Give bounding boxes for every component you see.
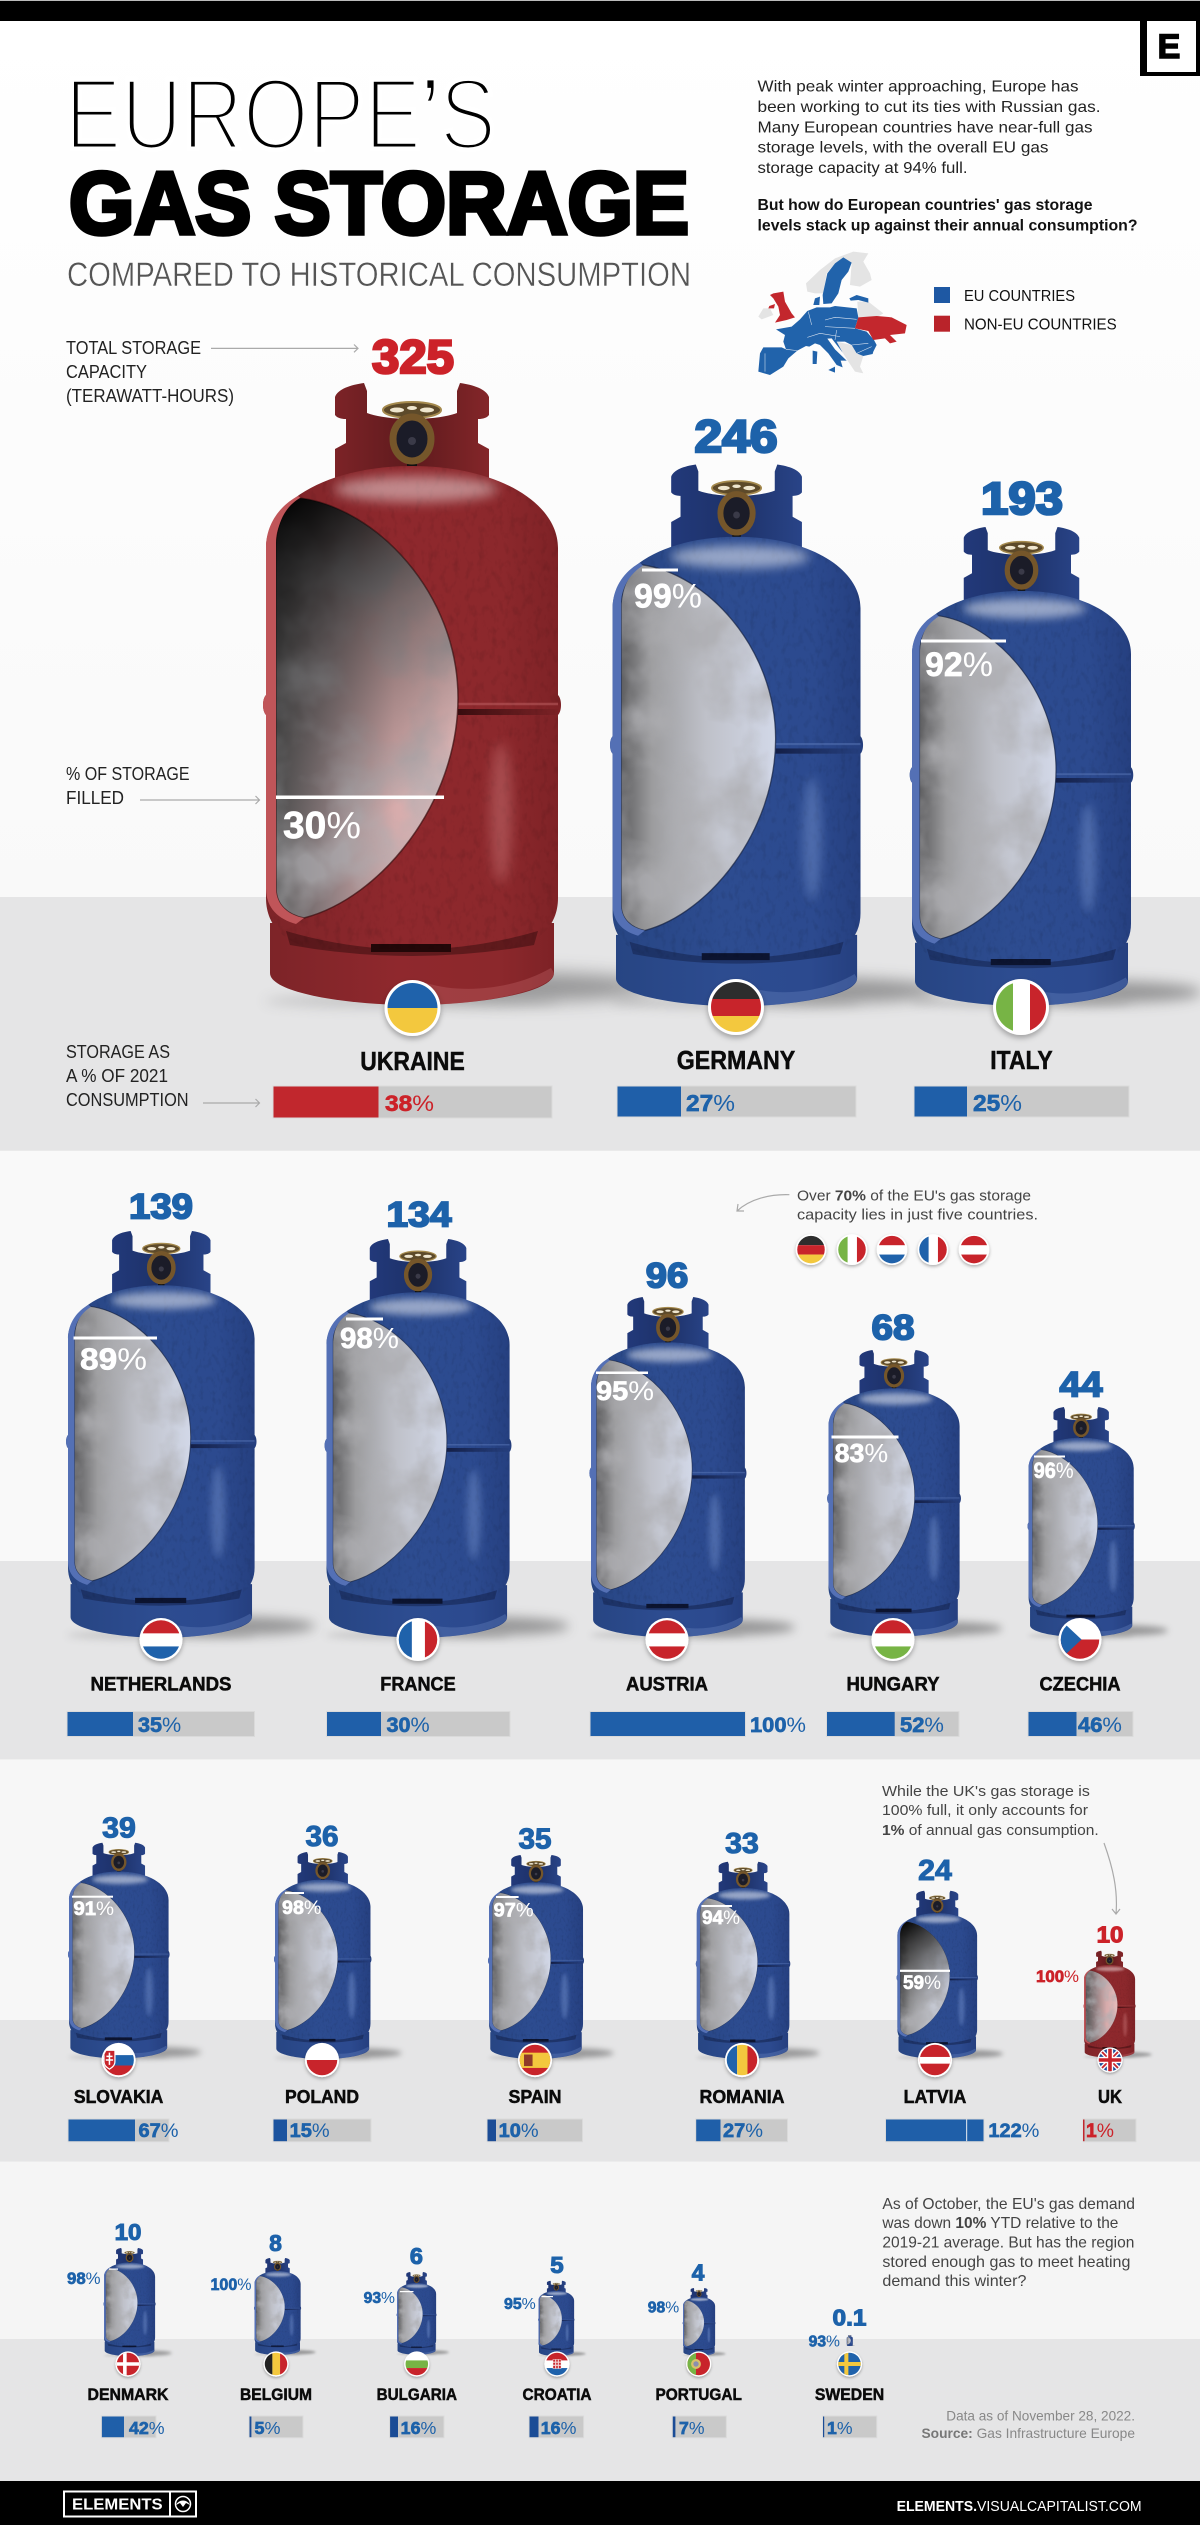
name: Denmark: DENMARK: [88, 2386, 169, 2404]
source note: Data as of November 28, 2022.: [946, 2408, 1135, 2424]
intro text: [758, 78, 1138, 234]
panel: Germany: [610, 411, 941, 1117]
bar: Italy: 25%: [973, 1090, 1022, 1116]
fill level: Romania: 94%: [702, 1907, 740, 1929]
callout: UK storage: 1% of annual gas consumption.: [882, 1822, 1099, 1839]
cylinder: Germany: [610, 464, 941, 1009]
callout: UK storage: While the UK's gas storage is: [882, 1783, 1090, 1800]
panel: Denmark: [67, 2219, 172, 2438]
intro text: been working to cut its ties with Russian gas.: [758, 99, 1100, 116]
value: Latvia capacity: 24: [918, 1855, 952, 1887]
fill level: Netherlands: [74, 1336, 157, 1376]
annotation: percent of storage filled: FILLED: [66, 788, 124, 808]
annotation: storage as percent of consumption: [66, 1042, 260, 1110]
value: Portugal capacity: 4: [692, 2260, 704, 2286]
bar: UK: [1083, 2119, 1136, 2142]
flag: Denmark: [115, 2351, 141, 2377]
bar: Germany: [617, 1086, 856, 1117]
flag: Belgium: [263, 2351, 289, 2377]
panel: Bulgaria: [364, 2243, 457, 2438]
panel: Austria: [589, 1256, 806, 1737]
footer logo: Elements: ELEMENTS: [72, 2496, 163, 2514]
bar: Bulgaria: [390, 2416, 444, 2438]
annotation: total storage capacity: [66, 338, 358, 406]
intro text: But how do European countries' gas storage: [758, 197, 1093, 214]
name: France: FRANCE: [380, 1674, 456, 1696]
bar: Bulgaria: 16%: [401, 2418, 436, 2438]
panel: Slovakia: [68, 1813, 201, 2142]
flag: Ukraine: [384, 980, 440, 1036]
panel: Poland: [273, 1821, 402, 2142]
bar: Netherlands: 35%: [138, 1714, 181, 1737]
panel: Ukraine: [263, 330, 653, 1118]
flag: Czechia: [1058, 1618, 1102, 1661]
name: Austria: AUSTRIA: [626, 1674, 708, 1696]
cylinder: Sweden: [847, 2335, 855, 2346]
panel: France: [325, 1196, 569, 1737]
bar: Spain: 10%: [499, 2121, 539, 2142]
fill level: Spain: 97%: [494, 1900, 534, 1922]
panel: UK: [1036, 1922, 1152, 2142]
bar: Latvia: 122%: [988, 2121, 1039, 2142]
bar: Slovakia: [68, 2119, 179, 2142]
fill level: Denmark: 98%: [67, 2270, 101, 2288]
panel: Latvia: [886, 1855, 1039, 2142]
title: [65, 59, 691, 294]
bar: France: [326, 1712, 510, 1737]
flag: Slovakia: [102, 2043, 136, 2077]
name: Ukraine: UKRAINE: [360, 1046, 465, 1076]
callout: UK storage: 100% full, it only accounts for: [882, 1802, 1088, 1819]
name: UK: UK: [1098, 2087, 1122, 2107]
cylinder: UK: [1083, 1951, 1152, 2058]
cylinder: Italy: [910, 527, 1200, 1008]
top black bar: [0, 0, 1200, 21]
name: Czechia: CZECHIA: [1040, 1674, 1121, 1696]
intro text: storage capacity at 94% full.: [758, 160, 968, 177]
cylinder: Latvia: [897, 1891, 1003, 2059]
bar: Ukraine: [273, 1086, 552, 1118]
annotation: total storage capacity: TOTAL STORAGE: [66, 338, 201, 358]
flag: France: [396, 1618, 440, 1661]
bar: Netherlands: [67, 1712, 254, 1737]
callout: five countries: Over 70% of the EU's gas storage: [797, 1188, 1031, 1204]
fill level: Portugal: 98%: [648, 2300, 679, 2317]
value: Austria capacity: 96: [646, 1256, 688, 1296]
Elements E logo: E: [1158, 28, 1180, 66]
cylinder: Belgium: [254, 2258, 316, 2356]
bar: Slovakia: 67%: [138, 2121, 179, 2142]
flag: Portugal: [686, 2351, 711, 2377]
fill level: Latvia: [900, 1970, 950, 1994]
name: Sweden: SWEDEN: [815, 2386, 884, 2404]
title: COMPARED TO HISTORICAL CONSUMPTION: [67, 256, 691, 294]
intro text: levels stack up against their annual consumption?: [758, 218, 1138, 234]
bar: Hungary: 52%: [900, 1714, 944, 1737]
flag: Croatia: [544, 2351, 570, 2377]
flag: Netherlands: [139, 1618, 183, 1661]
flag: Sweden: [837, 2351, 862, 2377]
flag: Poland: [305, 2043, 339, 2077]
footer logo: Elements: [64, 2491, 196, 2517]
fill level: Croatia: 95%: [504, 2296, 536, 2313]
bar: Portugal: [672, 2416, 726, 2438]
value: Bulgaria capacity: 6: [410, 2243, 423, 2269]
panel: Spain: [487, 1824, 614, 2142]
value: UK capacity: 10: [1097, 1922, 1123, 1948]
fill level: Bulgaria: 93%: [364, 2290, 395, 2307]
bar: Denmark: 42%: [129, 2418, 165, 2438]
panel: Croatia: [504, 2252, 592, 2438]
bar: Poland: 15%: [290, 2121, 330, 2142]
bar: Czechia: 46%: [1078, 1714, 1122, 1737]
fill level: Netherlands: 89%: [80, 1342, 147, 1376]
bar: Belgium: 5%: [254, 2418, 280, 2438]
fill level: Czechia: 96%: [1034, 1458, 1074, 1483]
fill level: Denmark: [67, 2268, 118, 2288]
name: Slovakia: SLOVAKIA: [74, 2087, 163, 2107]
bar: Sweden: 1%: [827, 2418, 852, 2438]
intro text: storage levels, with the overall EU gas: [758, 140, 1048, 156]
bar: Portugal: 7%: [679, 2418, 704, 2438]
name: Germany: GERMANY: [677, 1045, 795, 1075]
title: EUROPE’S: [65, 59, 496, 171]
value: Italy capacity: 193: [981, 473, 1063, 524]
flag: Italy: [993, 979, 1049, 1035]
bar: Italy: [914, 1086, 1129, 1117]
bar: Romania: 27%: [723, 2121, 763, 2142]
fill level: Hungary: 83%: [835, 1438, 888, 1468]
cylinder: Hungary: [827, 1350, 1002, 1638]
fill level: Ukraine: [276, 796, 444, 847]
flag: UK: [1097, 2047, 1123, 2073]
bar: Croatia: 16%: [541, 2418, 576, 2438]
panel: Czechia: [1028, 1366, 1168, 1737]
name: Croatia: CROATIA: [522, 2386, 592, 2404]
cylinder: Netherlands: [66, 1231, 315, 1640]
legend item: EU countries: EU COUNTRIES: [964, 288, 1075, 305]
cylinder: Denmark: [103, 2248, 172, 2357]
arrow: UK callout: [1104, 1843, 1120, 1914]
name: Latvia: LATVIA: [904, 2087, 966, 2107]
name: Italy: ITALY: [990, 1045, 1053, 1075]
bar: Croatia: [529, 2416, 584, 2438]
cylinder: Czechia: [1028, 1407, 1168, 1638]
value: Czechia capacity: 44: [1060, 1366, 1103, 1404]
value: Hungary capacity: 68: [872, 1308, 914, 1348]
fill level: Austria: 95%: [596, 1376, 654, 1406]
value: Slovakia capacity: 39: [102, 1813, 136, 1845]
name: Belgium: BELGIUM: [240, 2386, 312, 2404]
intro text: With peak winter approaching, Europe has: [758, 78, 1078, 96]
bar: Belgium: [249, 2416, 303, 2438]
fill level: UK: 100%: [1036, 1968, 1079, 1986]
cylinder: Poland: [274, 1852, 402, 2060]
name: Portugal: PORTUGAL: [655, 2386, 742, 2404]
name: Poland: POLAND: [285, 2087, 359, 2107]
name: Hungary: HUNGARY: [846, 1674, 940, 1696]
cylinder: Portugal: [683, 2288, 726, 2356]
flag: Austria: [645, 1618, 689, 1661]
value: Poland capacity: 36: [306, 1821, 338, 1853]
bar: Hungary: [826, 1712, 959, 1737]
callout: five countries: capacity lies in just five countries.: [797, 1206, 1038, 1224]
panel: Sweden: [809, 2305, 884, 2438]
cylinder: Croatia: [538, 2281, 586, 2356]
name: Netherlands: NETHERLANDS: [90, 1674, 232, 1696]
name: Spain: SPAIN: [508, 2087, 562, 2107]
annotation: percent of storage filled: [66, 764, 260, 808]
flag: Romania: [725, 2043, 759, 2077]
Elements E logo: [1140, 21, 1200, 76]
fill level: Italy: [921, 640, 1006, 684]
intro text: Many European countries have near-full gas: [758, 120, 1092, 136]
callout: EU gas demand: 2019-21 average. But has the region: [882, 2234, 1134, 2252]
callout: EU gas demand: stored enough gas to meet heating: [882, 2254, 1130, 2271]
callout: UK storage: [882, 1783, 1120, 1914]
fill level: Croatia: [504, 2296, 553, 2313]
value: Denmark capacity: 10: [115, 2219, 141, 2245]
annotation: storage as percent of consumption: STORAGE AS: [66, 1042, 170, 1062]
arrow: five countries: [737, 1195, 789, 1211]
fill level: France: 98%: [340, 1323, 399, 1355]
bar: Ukraine: 38%: [385, 1091, 434, 1116]
callout: EU gas demand: [881, 2196, 1135, 2290]
value: Belgium capacity: 8: [269, 2230, 282, 2256]
flag: Germany: [708, 979, 764, 1035]
panel: Hungary: [826, 1308, 1002, 1737]
cylinder: Bulgaria: [397, 2272, 449, 2355]
bar: Romania: [696, 2119, 788, 2142]
source note: [922, 2408, 1135, 2441]
map of Europe: [758, 252, 907, 375]
flags: five countries: [796, 1234, 989, 1265]
annotation: total storage capacity: (TERAWATT-HOURS): [66, 386, 234, 406]
source note: Source: Gas Infrastructure Europe: [922, 2425, 1135, 2441]
bar: Austria: [590, 1712, 806, 1737]
panel: Romania: [696, 1828, 819, 2142]
panel: Netherlands: [66, 1188, 315, 1737]
fill level: Latvia: 59%: [903, 1972, 941, 1994]
fill level: Italy: 92%: [925, 646, 993, 684]
value: Spain capacity: 35: [518, 1824, 552, 1856]
callout: EU gas demand: As of October, the EU's gas demand: [882, 2196, 1135, 2213]
fill level: Belgium: 100%: [210, 2276, 252, 2294]
bar: Czechia: [1028, 1712, 1133, 1737]
cylinder: Romania: [696, 1862, 819, 2060]
bar: Austria: 100%: [750, 1714, 806, 1737]
cylinder: Austria: [589, 1297, 795, 1639]
fill level: Poland: 98%: [282, 1897, 321, 1919]
panel: Portugal: [648, 2260, 742, 2438]
fill level: Slovakia: 91%: [74, 1898, 114, 1920]
flag: Bulgaria: [404, 2351, 429, 2377]
annotation: total storage capacity: CAPACITY: [66, 362, 147, 382]
bar: Poland: [273, 2119, 371, 2142]
value: Romania capacity: 33: [725, 1828, 759, 1860]
name: Romania: ROMANIA: [700, 2087, 784, 2107]
fill level: Sweden: 93%: [809, 2334, 840, 2351]
cylinder: Slovakia: [68, 1843, 201, 2060]
bar: Latvia: [886, 2119, 1039, 2142]
bar: Germany: 27%: [686, 1090, 735, 1116]
value: Ukraine capacity: 325: [372, 330, 454, 383]
annotation: storage as percent of consumption: CONSUMPTION: [66, 1090, 189, 1110]
bar: France: 30%: [386, 1714, 430, 1737]
bar: UK: 1%: [1086, 2121, 1114, 2142]
fill level: Germany: 99%: [634, 578, 702, 616]
callout: five countries: [737, 1188, 1038, 1265]
value: Netherlands capacity: 139: [129, 1188, 193, 1226]
panel: Belgium: [210, 2230, 316, 2438]
callout: EU gas demand: demand this winter?: [882, 2273, 1027, 2290]
bar: Denmark: [101, 2416, 165, 2438]
callout: EU gas demand: was down 10% YTD relative to the: [881, 2215, 1118, 2232]
annotation: storage as percent of consumption: A % OF 2021: [66, 1066, 168, 1086]
flag: Hungary: [871, 1618, 915, 1661]
bar: Spain: [487, 2119, 582, 2142]
legend item: non-EU countries: NON-EU COUNTRIES: [964, 317, 1117, 334]
fill level: Ukraine: 30%: [283, 805, 361, 847]
panel: Italy: [910, 473, 1200, 1117]
legend: [934, 287, 1117, 334]
cylinder: Spain: [488, 1855, 614, 2060]
cylinder: Ukraine: [263, 383, 653, 1008]
flag: Latvia: [918, 2043, 952, 2077]
fill level: Bulgaria: [364, 2290, 414, 2307]
annotation: percent of storage filled: % OF STORAGE: [66, 764, 190, 784]
cylinder: France: [325, 1239, 569, 1640]
footer url: ELEMENTS.VISUALCAPITALIST.COM: [897, 2498, 1142, 2515]
flag: Spain: [518, 2043, 552, 2077]
value: Croatia capacity: 5: [550, 2252, 564, 2278]
title: GAS STORAGE: [69, 154, 689, 253]
footer bar: [0, 2481, 1200, 2525]
value: Sweden capacity: 0.1: [832, 2305, 867, 2331]
name: Bulgaria: BULGARIA: [377, 2386, 457, 2404]
value: France capacity: 134: [386, 1196, 452, 1234]
value: Germany capacity: 246: [694, 411, 778, 462]
